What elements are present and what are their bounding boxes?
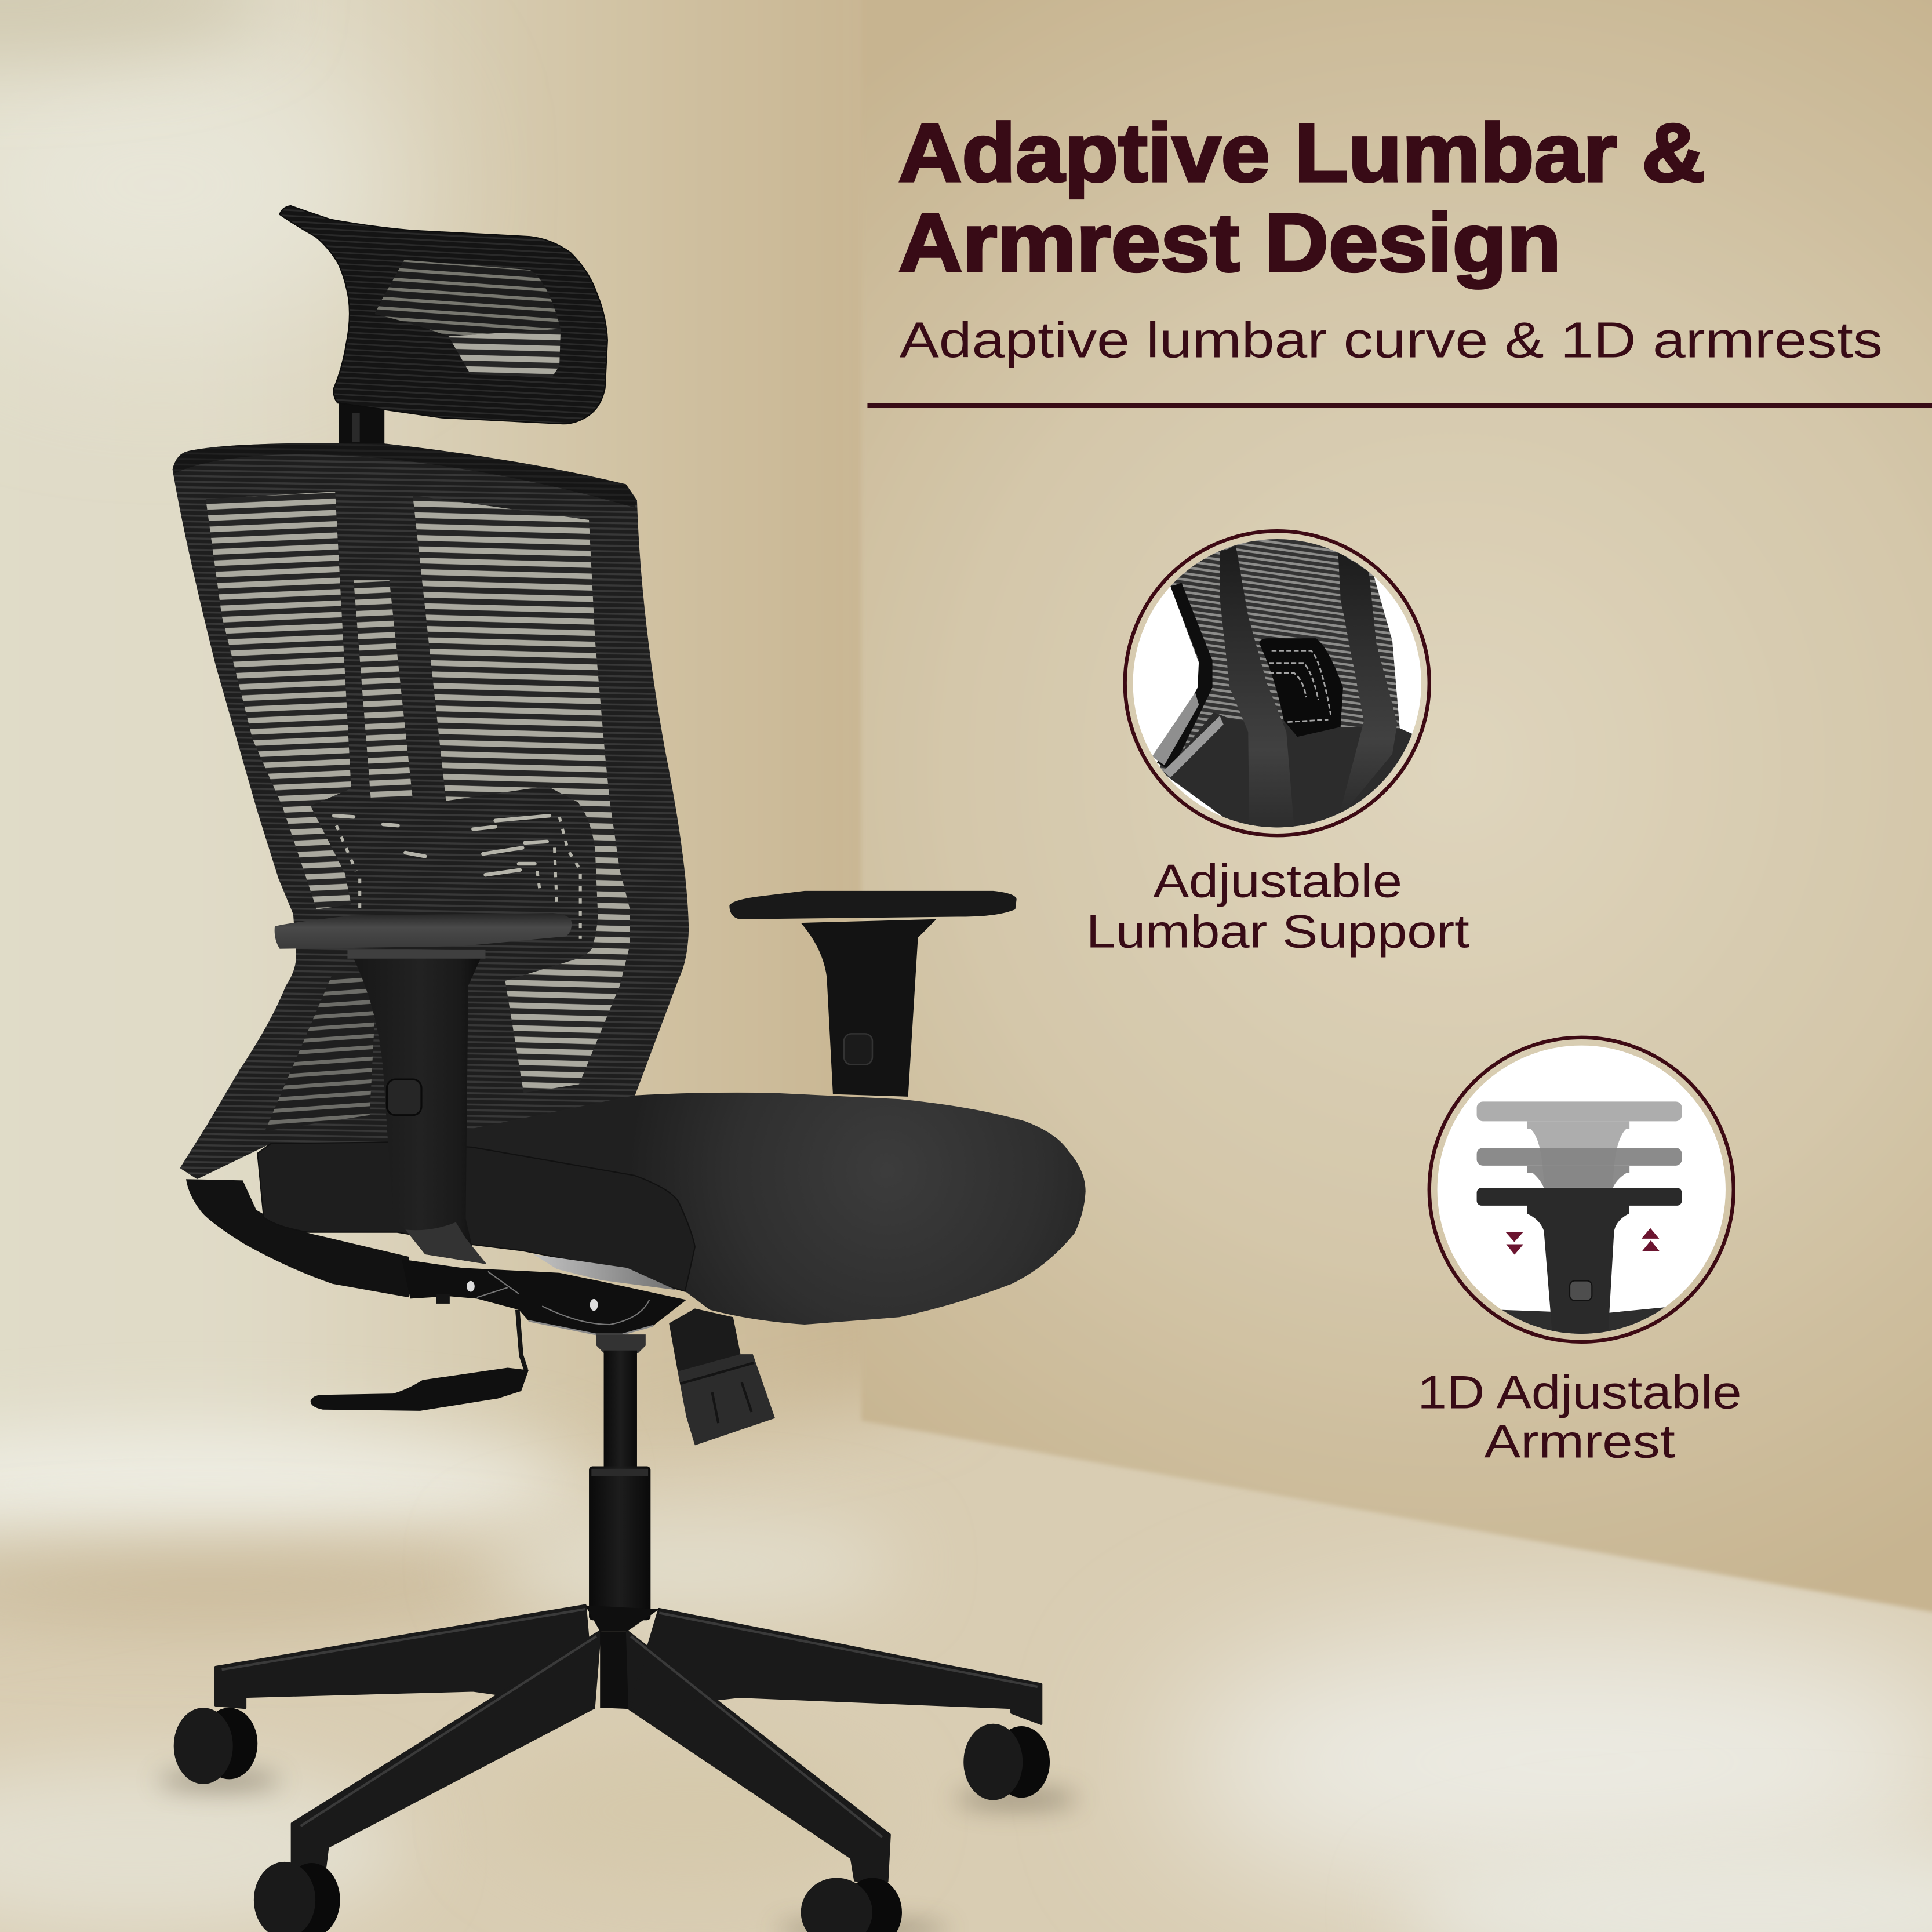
middle ghost arm <box>1477 1148 1682 1188</box>
back frame curve <box>186 1179 409 1297</box>
divider <box>867 403 1932 408</box>
gas cylinder <box>589 1351 650 1620</box>
seat mechanism <box>402 1254 686 1353</box>
column collar <box>596 1334 646 1353</box>
label: armrest <box>1418 1367 1742 1468</box>
label: lumbar support <box>1086 855 1469 958</box>
near armrest <box>275 913 572 1264</box>
far armrest pad <box>729 891 1017 919</box>
title <box>898 107 1705 289</box>
chair <box>158 206 1086 1932</box>
near armrest button <box>387 1079 421 1115</box>
active arm stem <box>1527 1205 1629 1337</box>
adjustment knob <box>669 1308 775 1445</box>
arrows up <box>1642 1228 1660 1251</box>
right mesh window <box>413 496 630 1093</box>
subtitle: Adaptive lumbar curve & 1D armrests <box>900 312 1883 368</box>
near armrest stem <box>354 959 487 1264</box>
left mesh window <box>206 492 351 909</box>
seat cushion <box>257 1093 1086 1325</box>
upper ghost arm <box>1477 1101 1682 1187</box>
wheel shadows <box>158 1771 1078 1932</box>
mechanism plate <box>533 1254 676 1290</box>
casters <box>174 1708 1050 1932</box>
label: armrest: Armrest <box>1484 1416 1675 1468</box>
near armrest flange <box>347 950 486 959</box>
lower left mesh window <box>265 973 377 1131</box>
headrest <box>280 206 607 424</box>
callout: armrest <box>1429 1038 1734 1343</box>
circle frame <box>1429 1038 1734 1342</box>
lumbar detail image <box>1133 539 1421 828</box>
label: lumbar support: Lumbar Support <box>1086 906 1469 958</box>
armrest detail image <box>1432 1040 1731 1343</box>
seat edge <box>1498 1307 1665 1343</box>
center frame band <box>1220 546 1295 838</box>
lower fabric <box>1165 713 1412 828</box>
star base <box>216 1606 1041 1882</box>
tilt lever <box>311 1310 529 1411</box>
far armrest stem <box>801 919 936 1097</box>
right frame band <box>1338 552 1397 820</box>
callout: lumbar support <box>1125 530 1429 850</box>
seat side panel <box>257 1142 695 1291</box>
near armrest pad <box>275 913 572 949</box>
left frame <box>1157 583 1213 772</box>
arrows down <box>1505 1232 1523 1255</box>
label: lumbar support: Adjustable <box>1154 855 1402 907</box>
title: Armrest Design <box>898 197 1561 289</box>
lumbar plate <box>1259 638 1343 737</box>
active arm pad <box>1477 1188 1682 1206</box>
lumbar support fragments <box>334 816 580 939</box>
label: armrest: 1D Adjustable <box>1418 1367 1742 1419</box>
stem button <box>1570 1281 1592 1301</box>
center mesh gap <box>354 580 413 800</box>
headrest post <box>339 401 384 447</box>
top edge of backrest <box>173 443 637 508</box>
circle frame <box>1125 531 1429 835</box>
title: Adaptive Lumbar & <box>898 107 1705 199</box>
far armrest <box>729 891 1017 1097</box>
far armrest button <box>844 1034 872 1065</box>
backrest mesh <box>173 443 689 1179</box>
